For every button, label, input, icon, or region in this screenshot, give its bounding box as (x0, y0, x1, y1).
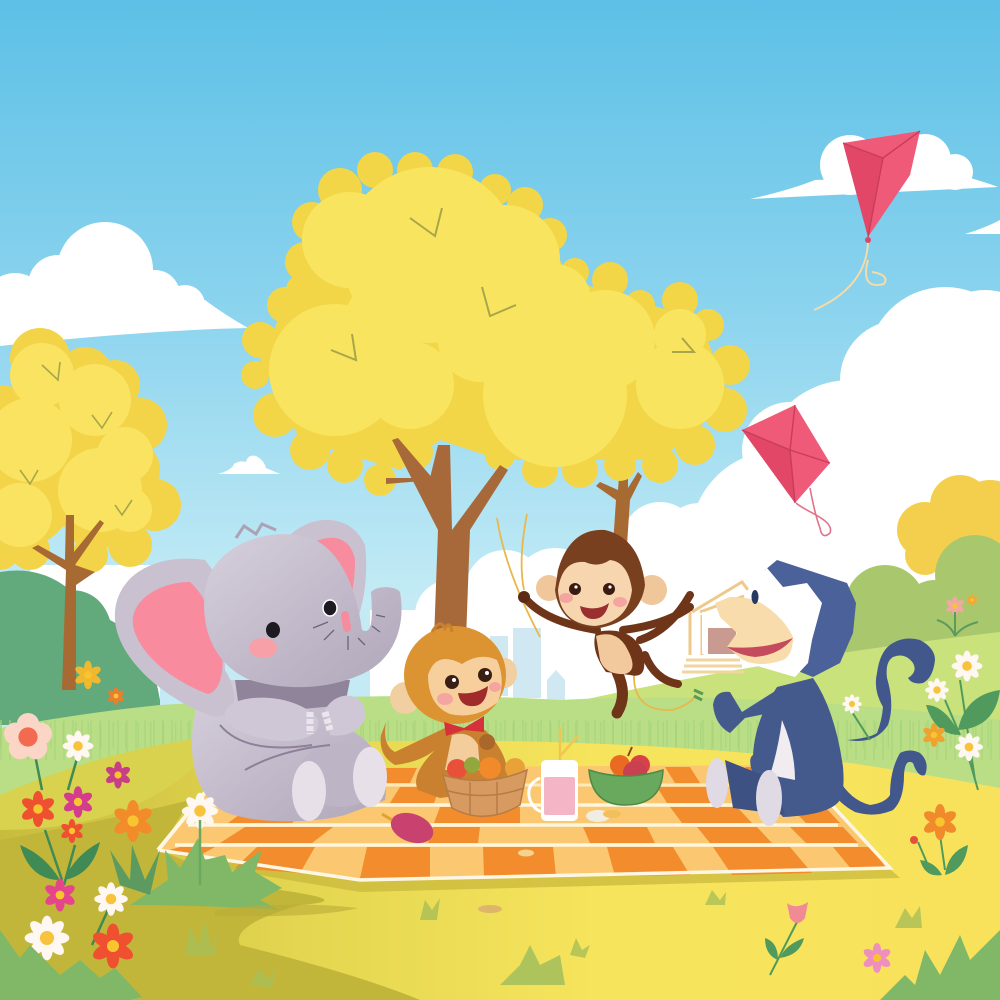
monkey body (594, 630, 644, 676)
animal: small orange monkey (381, 624, 517, 798)
elephant feet (292, 761, 326, 821)
animal: elephant (115, 520, 402, 821)
elephant face (249, 600, 385, 658)
tree: central trunk (386, 438, 508, 640)
ground: olive shadow lower left (0, 800, 420, 1000)
creature belly (770, 720, 795, 780)
tree: left yellow tree (0, 328, 181, 690)
creature legs and feet (725, 760, 785, 815)
monkey face (559, 583, 627, 619)
grass band (0, 696, 1000, 860)
cloud: large right bank (30, 287, 1000, 715)
flowers: left cluster (4, 661, 218, 995)
tree: central yellow canopy (241, 152, 750, 496)
elephant neck shadow (235, 680, 350, 715)
cloud: upper left (0, 222, 248, 346)
monkey vine (497, 514, 696, 710)
flowers: right side (765, 594, 1000, 975)
elephant left ear (115, 559, 234, 716)
picnic blanket: orange checks (158, 765, 890, 880)
kite: top pink kite (814, 131, 920, 310)
ground: yellow meadow (0, 741, 1000, 1000)
creature body (750, 678, 844, 817)
distant yellow bush right (897, 475, 1000, 580)
grass tufts: foreground right (880, 930, 1000, 1000)
blanket shadow (170, 860, 900, 892)
ground: bright patches and stones (215, 904, 502, 916)
creature lower tail (832, 750, 927, 815)
pink fruit on blanket (382, 807, 437, 849)
creature hood (745, 560, 856, 677)
picnic basket (443, 757, 527, 816)
cloud: small centre (218, 456, 280, 474)
monkey bow tie (444, 716, 484, 736)
ground: upper left lighter strip (0, 738, 200, 830)
monkey limbs (525, 595, 690, 684)
distant city skyline (490, 628, 565, 700)
tree: small right trunk (596, 465, 642, 560)
bowl of fruit (589, 747, 663, 805)
cloud: upper right behind kite (750, 134, 1000, 234)
animal: swinging brown monkey (497, 514, 703, 713)
small grass tufts (185, 890, 922, 988)
creature snout and mouth (715, 590, 793, 664)
creature white face (745, 568, 822, 677)
creature upper tail (847, 639, 935, 741)
elephant arms (225, 698, 318, 741)
distant green trees left (0, 570, 160, 725)
monkey eyes and smile (437, 668, 501, 706)
elephant right ear (290, 520, 366, 640)
elephant body (192, 680, 386, 821)
grass tufts: foreground left (0, 820, 282, 1000)
monkey ears (536, 575, 562, 601)
small plate with snack (518, 810, 621, 856)
kite: lower pink kite (742, 405, 831, 536)
hill: right grassy slope (560, 632, 1000, 860)
creature arm reaching left (713, 688, 785, 733)
distant green trees right (845, 535, 1000, 675)
elephant right leg (298, 743, 382, 807)
house in distance (682, 582, 748, 672)
glass of pink drink (529, 728, 578, 821)
elephant head and trunk (204, 534, 402, 687)
animal: blue long-snouted creature (706, 560, 935, 826)
monkey head (555, 530, 645, 628)
